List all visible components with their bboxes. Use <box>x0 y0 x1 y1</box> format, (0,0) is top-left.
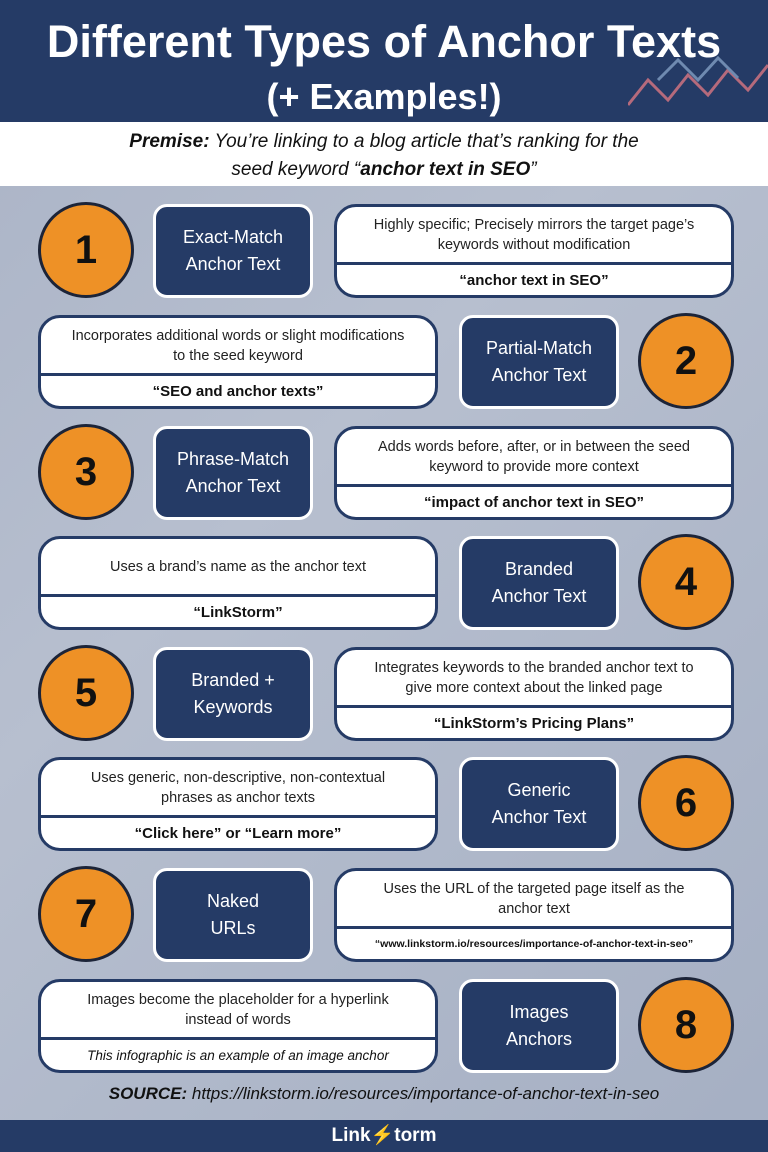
label 7: URLs <box>210 918 256 938</box>
row 4 <box>38 534 734 630</box>
desc 6: Uses generic, non-descriptive, non-contextual phrases as anchor texts <box>91 770 385 806</box>
circle 1 <box>38 202 134 298</box>
desc 7: “www.linkstorm.io/resources/importance-of-anchor-text-in-seo” <box>375 938 693 950</box>
label 2: Anchor Text <box>492 365 586 385</box>
row 5 <box>38 645 734 741</box>
label 8: Anchors <box>506 1029 572 1049</box>
label 3: Anchor Text <box>186 476 280 496</box>
label 1 <box>153 204 313 298</box>
desc 3: “impact of anchor text in SEO” <box>424 494 644 510</box>
circle 8 <box>638 977 734 1073</box>
title: Different Types of Anchor Texts <box>47 16 721 67</box>
circle 6 <box>638 755 734 851</box>
circle 3 <box>38 424 134 520</box>
desc 3 <box>334 426 734 520</box>
label 2: Partial-Match <box>486 338 592 358</box>
circle 5: 5 <box>75 671 97 715</box>
desc 3: Adds words before, after, or in between the seed keyword to provide more context <box>378 438 690 474</box>
circle 6: 6 <box>675 781 697 825</box>
circle 4 <box>638 534 734 630</box>
circle 1: 1 <box>75 228 97 272</box>
label 7: Naked <box>207 891 259 911</box>
desc 5: “LinkStorm’s Pricing Plans” <box>434 714 634 732</box>
label 5 <box>153 647 313 741</box>
label 3 <box>153 426 313 520</box>
premise <box>0 122 768 186</box>
label 6: Generic <box>507 780 570 800</box>
circle 3: 3 <box>75 450 97 494</box>
desc 8: This infographic is an example of an image anchor <box>87 1048 389 1062</box>
desc 4 <box>38 536 438 630</box>
label 6: Anchor Text <box>492 807 586 827</box>
desc 4: “LinkStorm” <box>193 604 283 620</box>
desc 2: Incorporates additional words or slight modifications to the seed keyword <box>72 328 404 364</box>
label 3: Phrase-Match <box>177 449 289 469</box>
desc 2 <box>38 315 438 409</box>
label 5: Keywords <box>193 697 272 717</box>
label 8 <box>459 979 619 1073</box>
desc 8: Images become the placeholder for a hyperlink instead of words <box>87 992 389 1028</box>
circle 2: 2 <box>675 339 697 383</box>
row 7 <box>38 866 734 962</box>
source: SOURCE: https://linkstorm.io/resources/importance-of-anchor-text-in-seo <box>109 1084 659 1103</box>
desc 1 <box>334 204 734 298</box>
row 1 <box>38 202 734 298</box>
circle 7 <box>38 866 134 962</box>
premise: Premise: You’re linking to a blog article that’s ranking for the <box>129 131 639 152</box>
label 6 <box>459 757 619 851</box>
circle 2 <box>638 313 734 409</box>
label 1: Anchor Text <box>186 254 280 274</box>
desc 8 <box>38 979 438 1073</box>
row 2 <box>38 313 734 409</box>
decorative zigzag <box>628 56 768 106</box>
desc 6 <box>38 757 438 851</box>
row 3 <box>38 424 734 520</box>
desc 4: Uses a brand’s name as the anchor text <box>110 558 366 574</box>
title: (+ Examples!) <box>266 76 502 117</box>
label 4 <box>459 536 619 630</box>
header <box>0 0 768 122</box>
footer logo <box>0 1120 768 1152</box>
premise: seed keyword “anchor text in SEO” <box>231 159 537 180</box>
desc 2: “SEO and anchor texts” <box>153 382 323 400</box>
footer logo: Link⚡torm <box>332 1125 436 1146</box>
label 7 <box>153 868 313 962</box>
label 2 <box>459 315 619 409</box>
circle 8: 8 <box>675 1003 697 1047</box>
row 6 <box>38 755 734 851</box>
desc 1: Highly specific; Precisely mirrors the target page’s keywords without modification <box>374 216 694 252</box>
circle 5 <box>38 645 134 741</box>
row 8 <box>38 977 734 1073</box>
circle 7: 7 <box>75 892 97 936</box>
desc 6: “Click here” or “Learn more” <box>135 824 341 842</box>
desc 5: Integrates keywords to the branded anchor text to give more context about the linked page <box>374 660 694 696</box>
label 4: Branded <box>505 559 573 579</box>
title <box>47 16 721 117</box>
label 1: Exact-Match <box>183 227 283 247</box>
label 8: Images <box>509 1002 568 1022</box>
desc 1: “anchor text in SEO” <box>459 272 609 288</box>
circle 4: 4 <box>675 560 697 604</box>
label 4: Anchor Text <box>492 586 586 606</box>
label 5: Branded + <box>191 670 275 690</box>
desc 7: Uses the URL of the targeted page itself as the anchor text <box>384 880 684 916</box>
desc 5 <box>334 647 734 741</box>
desc 7 <box>334 868 734 962</box>
